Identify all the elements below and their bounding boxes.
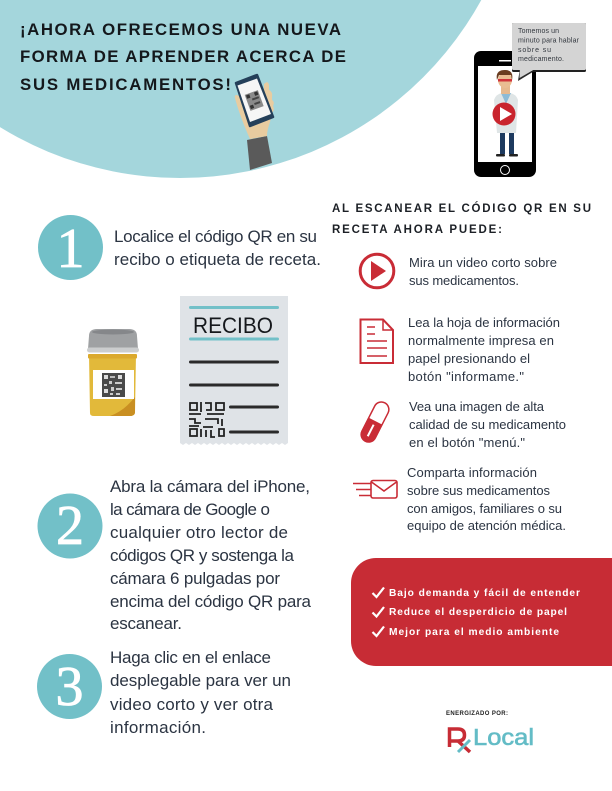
receipt: RECIBO — [193, 313, 273, 338]
speech bubble: medicamento. — [518, 56, 564, 63]
step 2 number — [38, 494, 102, 558]
benefit text: image: en el botón "menú." — [409, 435, 525, 450]
benefit text: video: Mira un video corto sobre — [409, 255, 557, 270]
icon: hand holding phone with QR code — [235, 75, 274, 170]
icon: play — [360, 254, 394, 288]
step 2 text: cámara 6 pulgadas por — [110, 569, 280, 588]
panel: red benefits box: Reduce el desperdicio de papel — [389, 607, 567, 618]
speech bubble: sobre su — [518, 47, 551, 54]
bottle QR code — [102, 373, 125, 397]
icon: document — [360, 320, 393, 363]
receipt QR code — [189, 402, 224, 437]
step 2 text: escanear. — [110, 614, 182, 633]
benefit text: video — [409, 255, 557, 288]
icon: medicine bottle — [87, 329, 139, 416]
step 2 text: códigos QR y sostenga la — [110, 546, 295, 565]
icon: pill — [358, 399, 392, 445]
benefit text: share: con amigos, familiares o su — [407, 501, 562, 516]
icon: phone with doctor video — [474, 51, 536, 177]
step 1 text — [114, 227, 321, 269]
title: SUS MEDICAMENTOS! — [20, 75, 231, 94]
benefit text: image: Vea una imagen de alta — [409, 399, 545, 414]
benefit text: information sheet — [408, 315, 560, 384]
icon: sending envelope — [353, 480, 397, 498]
check 1 — [372, 588, 384, 597]
step 1 number — [38, 215, 103, 280]
benefit text: video: sus medicamentos. — [409, 273, 519, 288]
step 3 number — [37, 654, 102, 719]
step 2 text: encima del código QR para — [110, 592, 312, 611]
header background circle — [0, 0, 524, 178]
step 3 text — [110, 648, 291, 737]
panel: red benefits box: Bajo demanda y fácil de entender — [389, 588, 580, 599]
step 2 text: cualquier otro lector de — [110, 523, 288, 542]
doctor — [494, 70, 518, 156]
title: FORMA DE APRENDER ACERCA DE — [20, 47, 346, 66]
logo: RxLocal — [450, 724, 534, 752]
title — [20, 20, 346, 94]
check 3 — [372, 626, 384, 636]
step 3 text: desplegable para ver un — [110, 671, 291, 690]
step 3 number: 3 — [56, 656, 84, 718]
step 1 number: 1 — [56, 218, 84, 280]
step 2 text — [110, 477, 312, 633]
right column heading: AL ESCANEAR EL CÓDIGO QR EN SU — [332, 202, 591, 215]
step 3 text: información. — [110, 718, 206, 737]
step 2 text: Abra la cámara del iPhone, — [110, 477, 310, 496]
benefit text: information sheet: Lea la hoja de información — [408, 315, 560, 330]
step 2 text: la cámara de Google o — [110, 500, 270, 519]
receipt — [180, 296, 288, 445]
benefit text: share — [407, 465, 566, 533]
speech bubble: Tomemos un — [518, 28, 559, 35]
powered by label: ENERGIZADO POR: — [446, 711, 508, 717]
benefit text: share: equipo de atención médica. — [407, 518, 566, 533]
speech bubble — [512, 23, 586, 81]
step 2 number: 2 — [56, 495, 84, 557]
panel: red benefits box — [351, 558, 612, 666]
step 1 text: recibo o etiqueta de receta. — [114, 250, 321, 269]
right column heading: RECETA AHORA PUEDE: — [332, 224, 502, 236]
benefit text: information sheet: normalmente impresa en — [408, 333, 554, 348]
step 3 text: video corto y ver otra — [110, 695, 274, 714]
benefit text: image: calidad de su medicamento — [409, 417, 566, 432]
check 2 — [372, 607, 384, 616]
step 3 text: Haga clic en el enlace — [110, 648, 271, 667]
benefit text: information sheet: botón "informame." — [408, 369, 524, 384]
benefit text: share: sobre sus medicamentos — [407, 483, 550, 498]
panel: red benefits box: Mejor para el medio ambiente — [389, 627, 559, 638]
benefit text: information sheet: papel presionando el — [408, 351, 530, 366]
benefit text: share: Comparta información — [407, 465, 537, 480]
benefit text: image — [409, 399, 566, 450]
right column heading — [332, 202, 591, 236]
title: ¡AHORA OFRECEMOS UNA NUEVA — [20, 20, 341, 39]
speech bubble: minuto para hablar — [518, 38, 580, 44]
step 1 text: Localice el código QR en su — [114, 227, 317, 246]
logo: RxLocal: Local — [473, 724, 534, 750]
